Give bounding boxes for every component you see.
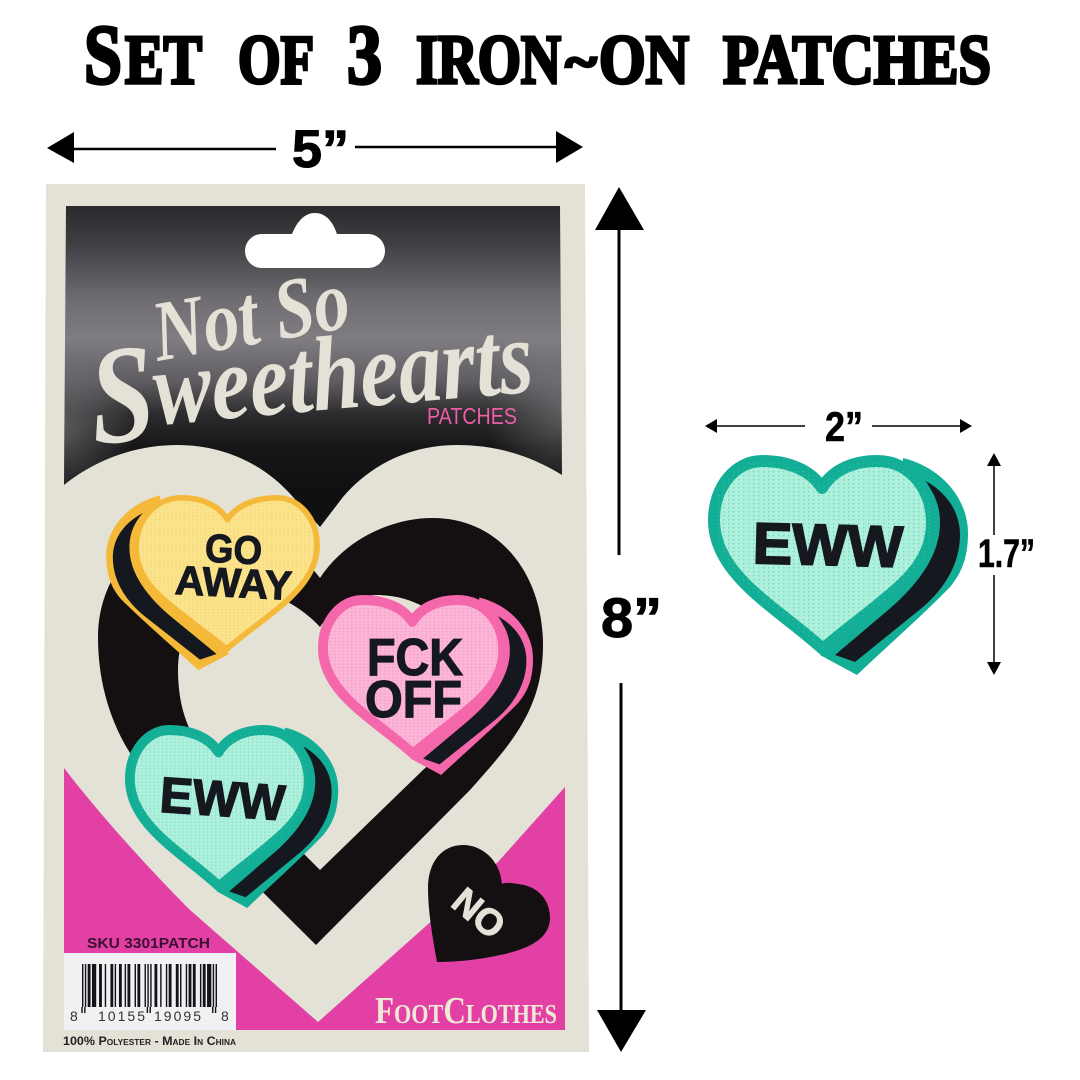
teal patch close-up: EWW: EWW [752,511,904,580]
title: PATCHES [723,22,991,99]
arrow: 5 inch width dimension [47,120,583,179]
small black heart with NO [428,845,550,962]
teal patch close-up: EWW [714,458,968,675]
pink patch: FCK OFF: FCK [367,629,463,687]
title: 3 [347,8,382,102]
card background [43,184,589,1052]
barcode: 10155 [98,1008,145,1024]
pink patch: FCK OFF: OFF [365,671,462,729]
brand script: Sweethearts: weethearts [148,298,537,447]
patches label: PATCHES [427,403,517,429]
arrow: 2 inch width dimension: 2” [825,403,863,450]
yellow patch: GO AWAY: GO [204,527,263,573]
teal patch: EWW [130,727,338,908]
brand logo: FootClothes: FootClothes [375,990,557,1032]
arrow: 5 inch width dimension: 5” [292,120,349,179]
card header gradient band [60,200,570,530]
title: IRON [416,22,561,99]
brand script: Not So: Not So [144,251,356,380]
pink bottom area [64,768,565,1030]
material note: 100% Polyester - Made In China [63,1034,236,1048]
yellow patch: GO AWAY [106,495,317,670]
title: ~ [566,38,596,87]
teal patch: EWW: EWW [158,767,288,831]
arrow: 1.7 inch height dimension [978,453,1035,675]
barcode [64,953,236,1030]
title: ON [599,22,689,99]
barcode: 8 [221,1008,229,1024]
panel: product card [43,184,589,1052]
title: OF [238,22,312,99]
arrow: 1.7 inch height dimension: 1.7” [978,532,1035,576]
small black heart with NO: NO [444,880,513,947]
arrow: 8 inch height dimension: 8” [601,586,662,649]
barcode: 8 [70,1008,78,1024]
arrow: 2 inch width dimension [705,403,972,450]
hang hole [245,213,385,268]
title: S [84,8,122,102]
SKU label: SKU 3301PATCH [87,935,210,952]
brand script: Sweethearts: S [83,315,160,475]
black outline heart [98,518,543,945]
title: ET [125,22,201,99]
barcode: 19095 [154,1008,201,1024]
arrow: 8 inch height dimension [595,187,662,1052]
pink patch: FCK OFF [323,597,533,775]
yellow patch: GO AWAY: AWAY [174,557,293,609]
